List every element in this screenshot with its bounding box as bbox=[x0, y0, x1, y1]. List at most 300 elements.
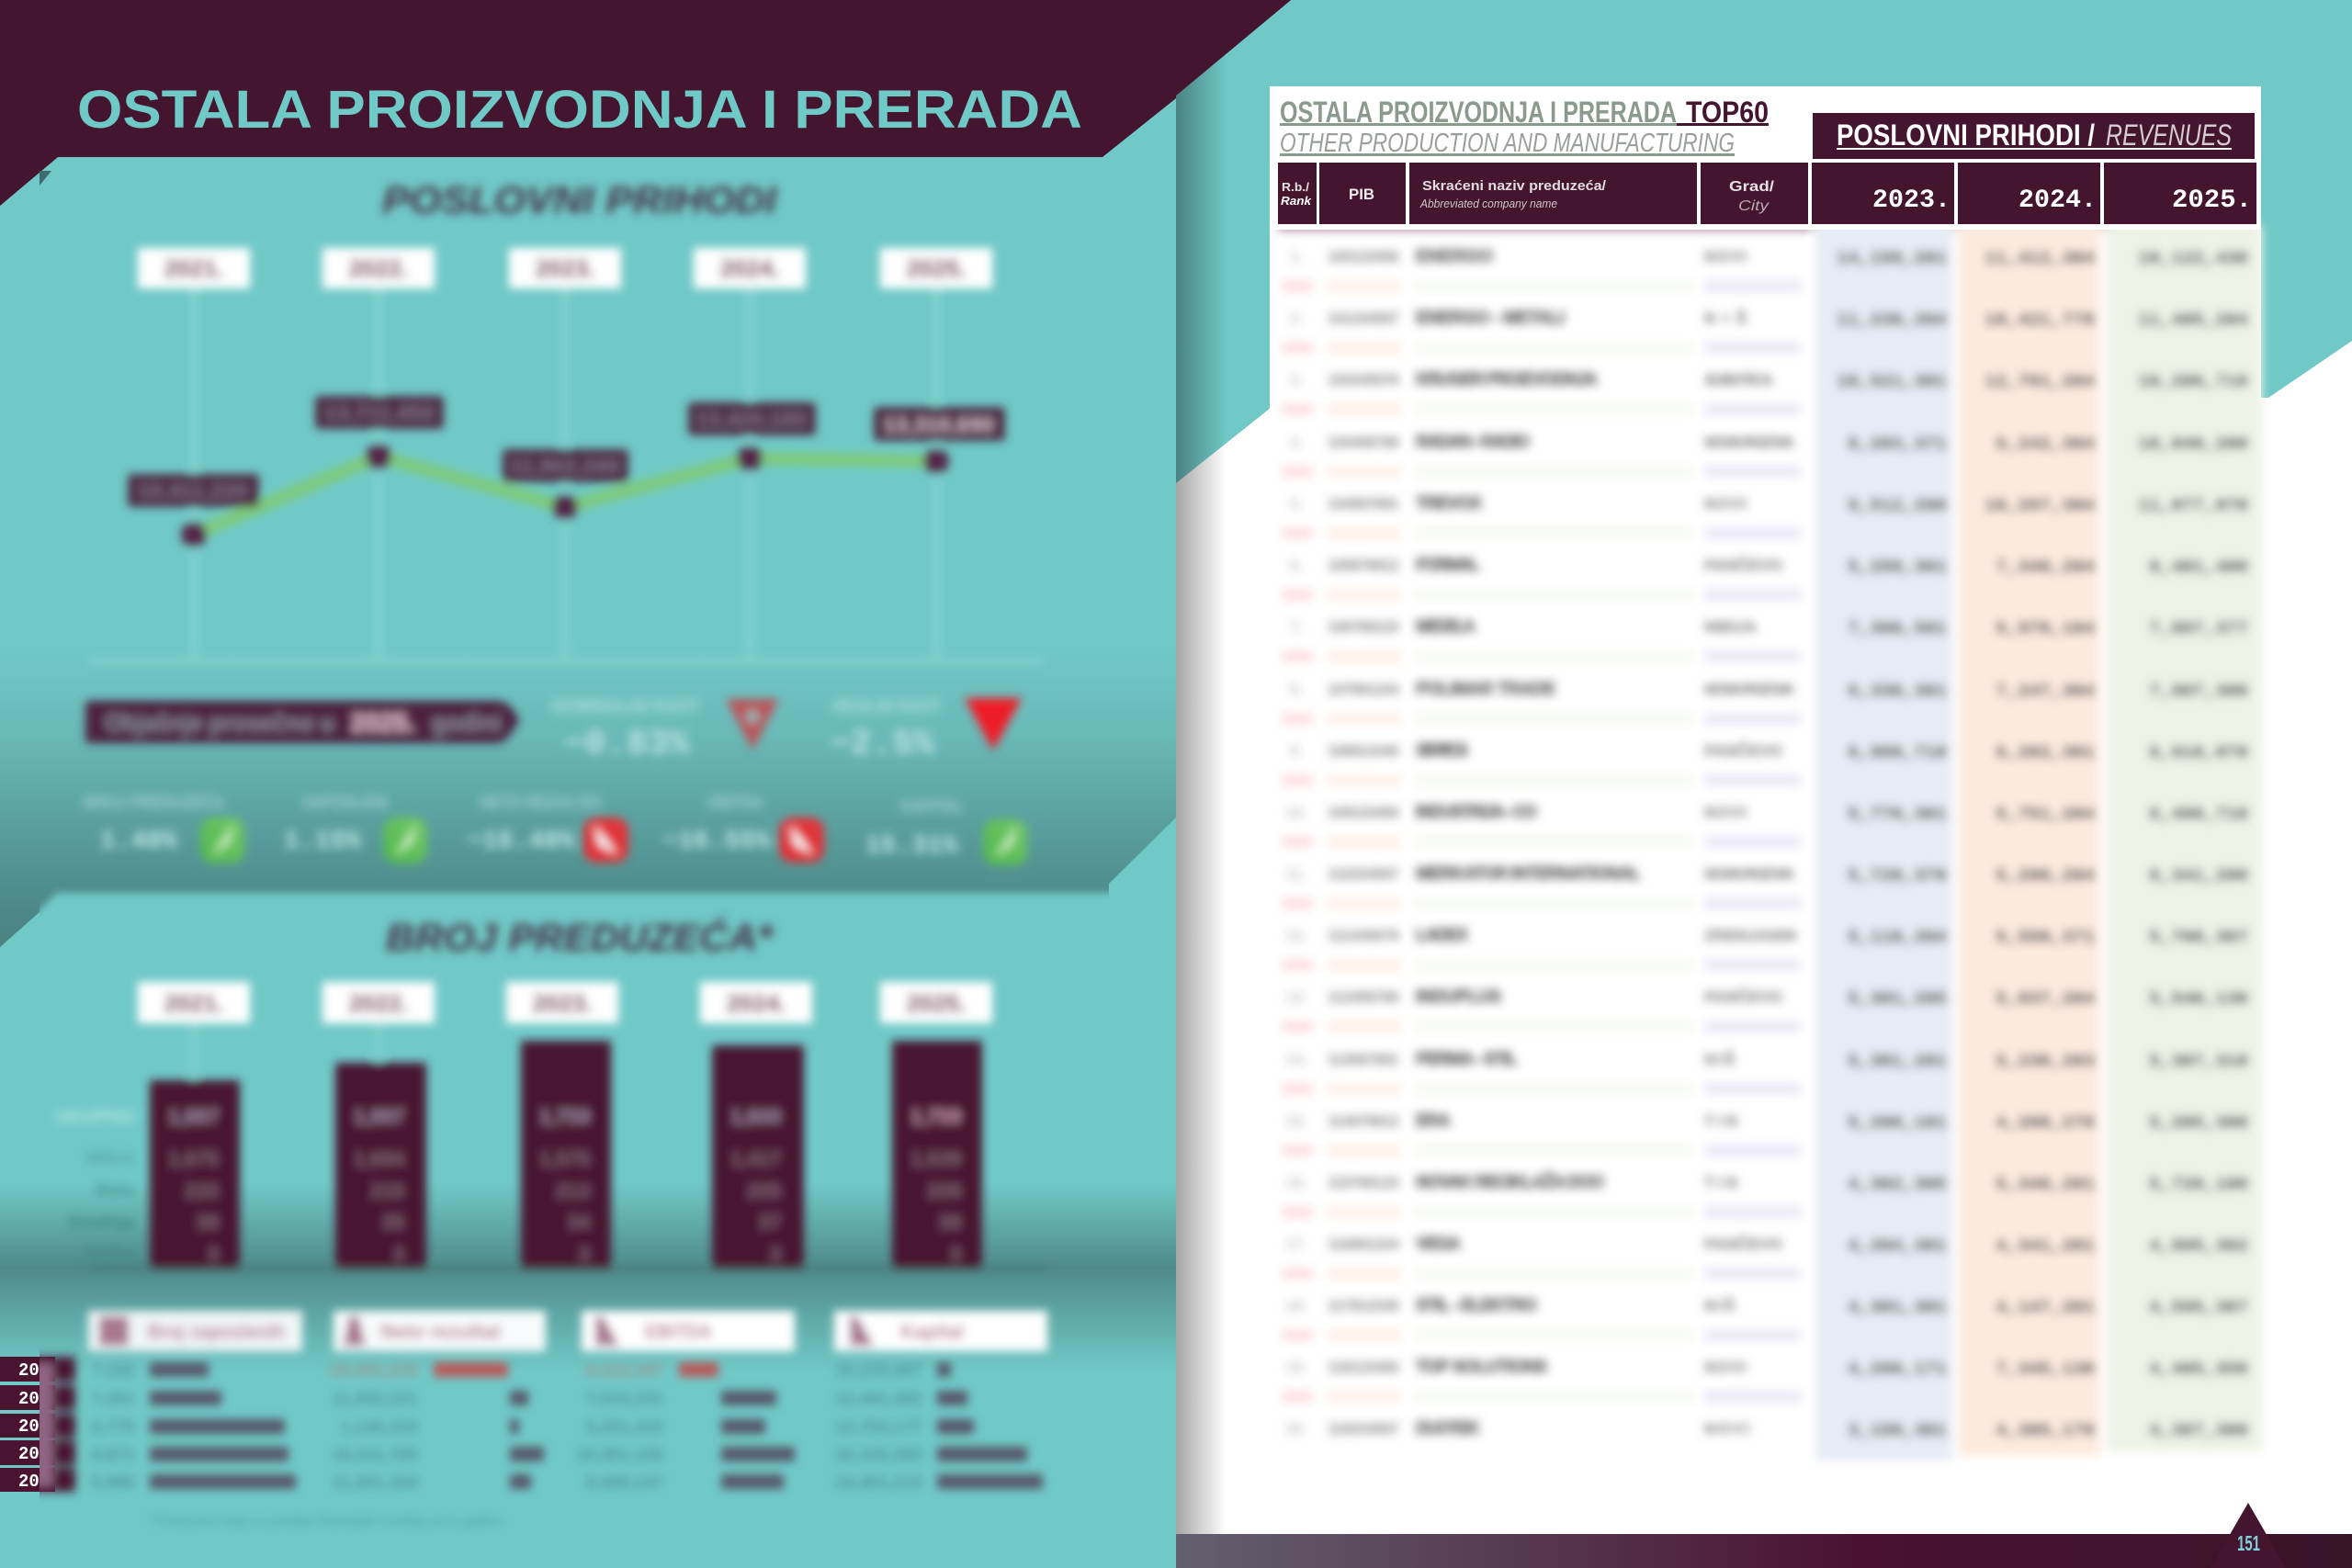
row 5 bbox=[1282, 494, 2248, 539]
row 8: 8. bbox=[1290, 681, 1303, 698]
bar values bbox=[168, 1105, 961, 1266]
row 14 bbox=[1282, 1050, 2248, 1095]
row 8: NOVA PAZOVA bbox=[1704, 681, 1794, 698]
row 4 bbox=[1282, 433, 2248, 478]
year tabs, left edge: 20 bbox=[18, 1444, 40, 1464]
row 12: LADEX bbox=[1416, 926, 1468, 945]
row 20 bbox=[1285, 1419, 2248, 1442]
row 8: 107891234 bbox=[1328, 681, 1400, 698]
stat: kapital: KAPITAL bbox=[900, 797, 964, 817]
line chart bbox=[90, 248, 1043, 661]
bar values: 35 bbox=[382, 1211, 404, 1234]
column header: city: Grad/ bbox=[1729, 179, 1775, 195]
row 15: 5,200,101 bbox=[1848, 1113, 1947, 1134]
bar chart: company counts bbox=[55, 982, 1046, 1269]
row 8: 7,807,300 bbox=[2149, 682, 2248, 703]
year labels: 2021. bbox=[164, 989, 224, 1017]
bar values: 213 bbox=[556, 1179, 590, 1202]
mini chart: ebitda: 10,301,120 bbox=[576, 1446, 663, 1465]
row 9: 9. bbox=[1290, 742, 1303, 760]
row 18: NIŠ bbox=[1704, 1297, 1735, 1314]
stat: broj preduzeća: BROJ PREDUZEĆA bbox=[84, 793, 224, 813]
mini chart: employees: 8,775 bbox=[91, 1418, 135, 1438]
stat: zaposleni bbox=[284, 794, 427, 863]
row 17: PANČEVO bbox=[1704, 1235, 1782, 1253]
row 19: TOP SOLUTIONS bbox=[1416, 1358, 1547, 1377]
row 19: 118123456 bbox=[1328, 1359, 1399, 1376]
mini chart: ebitda: 5,201,415 bbox=[585, 1418, 663, 1438]
revenues banner: POSLOVNI PRIHODI / bbox=[1837, 118, 2095, 152]
row 4: RADAN - RADIO bbox=[1416, 433, 1530, 452]
row 2: 10,421,770 bbox=[1984, 310, 2095, 332]
first section shaded band bbox=[0, 643, 1176, 951]
bar values: 3 bbox=[393, 1243, 404, 1266]
button: broj zaposlenih: Broj zaposlenih bbox=[148, 1320, 285, 1343]
bar values: 220 bbox=[185, 1179, 219, 1202]
row 15 bbox=[1282, 1111, 2248, 1156]
year labels: 2021. bbox=[164, 254, 224, 282]
footer bar bbox=[1176, 1534, 2352, 1568]
row 1: ENERGO bbox=[1416, 247, 1493, 266]
bar values: 38 bbox=[197, 1211, 219, 1234]
stat: kapital bbox=[865, 797, 1027, 865]
row 4: NOVA PAZOVA bbox=[1704, 434, 1794, 451]
row 5: 104567891 bbox=[1328, 495, 1399, 513]
column header: company name bbox=[1419, 178, 1607, 210]
mini chart: capital: 10,215,407 bbox=[835, 1361, 922, 1381]
table subtitle: OTHER PRODUCTION AND MANUFACTURING bbox=[1280, 129, 1735, 158]
row 10: 5,751,204 bbox=[1996, 805, 2095, 826]
row 4: 103456789 bbox=[1328, 434, 1399, 451]
row 3: SUBOTICA bbox=[1704, 371, 1773, 389]
bar values: 38 bbox=[939, 1211, 961, 1234]
row 15: ERA bbox=[1416, 1111, 1451, 1131]
year tabs, left edge: 20 bbox=[18, 1416, 40, 1437]
dark corner on right page bbox=[1176, 0, 1291, 96]
revenues banner: REVENUES bbox=[2106, 118, 2232, 152]
bar values: 1,417 bbox=[730, 1147, 781, 1170]
row 20: 3,150,301 bbox=[1848, 1421, 1947, 1442]
row 16: NOVAK RECIKLAŽA DOO bbox=[1416, 1172, 1604, 1192]
bar values: 3 bbox=[770, 1243, 781, 1266]
row 16: 5,720,100 bbox=[2149, 1175, 2248, 1196]
row 9: 6,960,710 bbox=[1848, 743, 1947, 764]
row 18: 18. bbox=[1285, 1297, 1307, 1314]
mini chart: net result bbox=[325, 1361, 544, 1493]
row labels: Mala bbox=[95, 1180, 136, 1201]
callout pill bbox=[88, 704, 516, 740]
row 16: 5,340,201 bbox=[1996, 1175, 2095, 1196]
row 19: 4,405,350 bbox=[2149, 1359, 2248, 1381]
year labels: 2022. bbox=[348, 254, 409, 282]
row 11: NOVA PAZOVA bbox=[1704, 865, 1794, 883]
right page background bbox=[1176, 0, 2352, 1568]
row 1: 11,412,304 bbox=[1984, 249, 2095, 270]
stat: nominal change: NOMINALNI RAST bbox=[551, 697, 699, 716]
stat: zaposleni: ZAPOSLENI bbox=[301, 794, 388, 813]
row 12: 5,700,307 bbox=[2149, 928, 2248, 949]
row 8: 6,330,301 bbox=[1848, 682, 1947, 703]
column headers: years bbox=[1872, 186, 2252, 215]
bars bbox=[150, 1041, 982, 1269]
row 17: 17. bbox=[1285, 1235, 1307, 1253]
row labels: Mikro bbox=[86, 1148, 135, 1168]
row 14: 5,230,203 bbox=[1996, 1052, 2095, 1073]
button: kapital bbox=[834, 1311, 1047, 1351]
row 10: 109123456 bbox=[1328, 804, 1399, 821]
row 6: PANČEVO bbox=[1704, 557, 1782, 574]
row 2 bbox=[1282, 309, 2248, 354]
table title: TOP60 bbox=[1686, 96, 1769, 129]
lower section teal, right edge bbox=[1109, 818, 1176, 1568]
connector lines bbox=[194, 1023, 379, 1080]
row 8 bbox=[1282, 680, 2248, 725]
row 13: INDUPLUS bbox=[1416, 987, 1501, 1007]
icon: outlined down triangle bbox=[726, 699, 779, 750]
row 12: 5,550,371 bbox=[1996, 928, 2095, 949]
left page background bbox=[0, 0, 1176, 1568]
column header: rank: Rank bbox=[1281, 194, 1312, 208]
row 17: 116891234 bbox=[1328, 1235, 1400, 1253]
mini chart: employees: 8,871 bbox=[91, 1446, 135, 1465]
row 1 bbox=[1282, 247, 2248, 292]
mini chart: employees bbox=[91, 1361, 296, 1493]
stat: nominal change: −0.83% bbox=[564, 725, 690, 764]
bar values: 1,675 bbox=[168, 1147, 219, 1170]
page number marker bbox=[2211, 1503, 2286, 1568]
row 5: NOVI bbox=[1704, 495, 1747, 513]
row 5: 5. bbox=[1290, 495, 1303, 513]
mini chart: employees: 7,102 bbox=[91, 1361, 135, 1381]
bar values: 1,575 bbox=[539, 1147, 590, 1170]
row 2: 11,230,204 bbox=[1837, 310, 1947, 332]
row 10: NOVI bbox=[1704, 804, 1747, 821]
row 6: FORMAL bbox=[1416, 556, 1480, 575]
mini chart: ebitda: 7,510,231 bbox=[585, 1390, 663, 1409]
row 19: 4,260,171 bbox=[1848, 1359, 1947, 1381]
bar values: 3 bbox=[579, 1243, 590, 1266]
stat: real change: −2.5% bbox=[830, 725, 934, 764]
bar values: 1,600 bbox=[730, 1105, 781, 1128]
row 20: 119234567 bbox=[1328, 1420, 1399, 1438]
data points bbox=[181, 444, 949, 547]
row 16: 115789123 bbox=[1328, 1174, 1399, 1191]
row 13 bbox=[1282, 987, 2248, 1032]
bar values: 1,759 bbox=[539, 1105, 590, 1128]
row 9: STRATOS bbox=[1416, 741, 1468, 761]
row 7: MEDELA bbox=[1416, 617, 1476, 637]
bar values: 1,759 bbox=[910, 1105, 961, 1128]
row 6: 5,250,301 bbox=[1848, 558, 1947, 579]
year labels: 2022. bbox=[348, 989, 409, 1017]
button: ebitda bbox=[582, 1311, 795, 1351]
row 3: 10,521,301 bbox=[1837, 372, 1947, 393]
row 6: 7,340,204 bbox=[1996, 558, 2095, 579]
row 1: 14,150,201 bbox=[1837, 249, 1947, 270]
row 6: 105678912 bbox=[1328, 557, 1399, 574]
row 9 bbox=[1282, 741, 2248, 786]
button: neto rezultat: Neto rezultat bbox=[380, 1320, 502, 1343]
row 13: 112456789 bbox=[1328, 988, 1399, 1006]
mini bar charts bbox=[91, 1361, 1043, 1493]
row 1: 1. bbox=[1290, 248, 1303, 265]
row 14: NIŠ bbox=[1704, 1051, 1735, 1068]
revenues banner bbox=[1813, 113, 2255, 159]
row 2: 2. bbox=[1290, 310, 1303, 327]
bar values: 37 bbox=[759, 1211, 781, 1234]
row 17: VEGA bbox=[1416, 1235, 1461, 1254]
row 18: STIL - ELEKTRO bbox=[1416, 1296, 1537, 1315]
row 9: PANČEVO bbox=[1704, 742, 1782, 760]
bar values: 1,887 bbox=[168, 1105, 219, 1128]
row 7: 5,970,104 bbox=[1996, 619, 2095, 640]
mini chart: capital bbox=[835, 1361, 1043, 1493]
row labels: Srednja bbox=[68, 1213, 136, 1233]
row 2: NIŠ bbox=[1704, 310, 1747, 327]
value labels bbox=[128, 396, 1005, 507]
column header cells bbox=[1278, 163, 2256, 224]
row 7: 7,380,501 bbox=[1848, 619, 1947, 640]
year tabs, left edge: 20 bbox=[18, 1360, 40, 1381]
row 20: 20. bbox=[1285, 1420, 1307, 1438]
trend line bbox=[194, 457, 936, 535]
stat: real change: REALNI RAST bbox=[833, 697, 941, 716]
row 14: 5,301,201 bbox=[1848, 1052, 1947, 1073]
row 11: 110234567 bbox=[1328, 865, 1399, 883]
button: kapital: Kapital bbox=[900, 1320, 964, 1343]
button: broj zaposlenih bbox=[88, 1311, 302, 1351]
row 3: 102345678 bbox=[1328, 371, 1399, 389]
year labels bbox=[138, 982, 992, 1023]
row 19: 7,345,130 bbox=[1996, 1359, 2095, 1381]
stat row bbox=[84, 793, 1027, 865]
row 12: 12. bbox=[1285, 927, 1307, 944]
row 20: 4,305,170 bbox=[1996, 1421, 2095, 1442]
row 13: 5,037,204 bbox=[1996, 989, 2095, 1010]
row 12 bbox=[1282, 926, 2248, 971]
year tabs, left edge: 20 bbox=[18, 1472, 40, 1492]
year labels: 2023. bbox=[535, 254, 595, 282]
row 12: 5,110,204 bbox=[1848, 928, 1947, 949]
mini chart: ebitda bbox=[576, 1361, 795, 1493]
row 7: 106789123 bbox=[1328, 618, 1399, 636]
row 2: 101234567 bbox=[1328, 310, 1399, 327]
row 5: 11,077,070 bbox=[2138, 496, 2248, 517]
row 5: 10,297,304 bbox=[1984, 496, 2095, 517]
row 10: 5,770,301 bbox=[1848, 805, 1947, 826]
value labels: 13,310,690 bbox=[884, 413, 994, 436]
mini chart: capital: 12,704,177 bbox=[835, 1418, 922, 1438]
row 11: 5,720,370 bbox=[1848, 866, 1947, 887]
stat: kapital: 15.31% bbox=[865, 832, 958, 861]
year tabs, left edge bbox=[0, 1357, 55, 1492]
row 20: DUOTEK bbox=[1416, 1419, 1480, 1438]
stat: ebitda bbox=[662, 794, 824, 863]
row 15: 114678912 bbox=[1328, 1112, 1399, 1130]
row 11: MERKATOR INTERNATIONAL bbox=[1416, 864, 1641, 884]
year labels bbox=[138, 248, 992, 288]
bar values: 3 bbox=[208, 1243, 219, 1266]
column header: city: City bbox=[1738, 198, 1770, 214]
row 12: 111345678 bbox=[1328, 927, 1399, 944]
mini chart: net result: 10,211,705 bbox=[332, 1446, 418, 1465]
row 11: 6,341,200 bbox=[2149, 866, 2248, 887]
row 18: 4,595,307 bbox=[2149, 1298, 2248, 1319]
column header: PIB: PIB bbox=[1349, 186, 1374, 203]
callout pill: godini bbox=[432, 708, 502, 737]
value labels: 10,411,220 bbox=[139, 479, 247, 502]
row 15: TIN bbox=[1704, 1112, 1737, 1130]
year column tints bbox=[1816, 225, 2262, 1461]
column header: company name: Abbreviated company name bbox=[1419, 197, 1557, 210]
stat: neto rezultat: −16.40% bbox=[467, 828, 575, 856]
stat: neto rezultat bbox=[467, 794, 628, 863]
row 10: INDUSTRIJA - CO bbox=[1416, 803, 1537, 822]
mini chart: capital: 22,102,350 bbox=[835, 1446, 922, 1465]
row 8: 7,247,304 bbox=[1996, 682, 2095, 703]
row 3: 10,206,710 bbox=[2138, 372, 2248, 393]
button: ebitda: EBITDA bbox=[645, 1320, 712, 1343]
lower section teal, left edge bbox=[0, 912, 40, 1568]
row 18 bbox=[1282, 1296, 2248, 1341]
gutter shadow bbox=[1176, 0, 1227, 1534]
stat: neto rezultat: NETO REZULTAT bbox=[480, 794, 603, 813]
panel: table header card bbox=[1270, 86, 2261, 230]
row 1: 100123456 bbox=[1328, 248, 1399, 265]
row 11: 5,200,204 bbox=[1996, 866, 2095, 887]
lower section teal panel bbox=[40, 889, 1109, 951]
mini chart: employees: 7,251 bbox=[91, 1390, 135, 1409]
row labels: Velika bbox=[83, 1243, 136, 1263]
column header: company name: Skraćeni naziv preduzeća/ bbox=[1422, 178, 1607, 194]
year tabs, left edge: 20 bbox=[18, 1389, 40, 1409]
row labels: UKUPNO bbox=[55, 1107, 135, 1127]
row 17: 4,341,201 bbox=[1996, 1236, 2095, 1258]
row 17 bbox=[1282, 1235, 2248, 1280]
stat: broj preduzeća: 1.40% bbox=[100, 828, 177, 856]
mini chart: capital: 12,441,302 bbox=[835, 1390, 922, 1409]
bar values: 205 bbox=[747, 1179, 781, 1202]
row 1: 10,122,430 bbox=[2138, 249, 2248, 270]
row 20: NOVI bbox=[1704, 1420, 1749, 1438]
row 20: 4,387,300 bbox=[2149, 1421, 2248, 1442]
row 9: 108912345 bbox=[1328, 742, 1399, 760]
row 13: 5,301,205 bbox=[1848, 989, 1947, 1010]
row 9: 6,910,070 bbox=[2149, 743, 2248, 764]
row 7 bbox=[1282, 617, 2248, 662]
mini chart: ebitda: 8,405,147 bbox=[585, 1473, 663, 1493]
row 16 bbox=[1282, 1172, 2248, 1218]
page number marker: 151 bbox=[2237, 1531, 2260, 1555]
row 18: 4,147,201 bbox=[1996, 1298, 2095, 1319]
column header: city bbox=[1729, 179, 1775, 214]
row 13: PANČEVO bbox=[1704, 988, 1782, 1006]
mini chart: ebitda: -4,112,107 bbox=[581, 1361, 663, 1381]
row 16: TIN bbox=[1704, 1174, 1737, 1191]
row labels bbox=[55, 1107, 136, 1263]
heading: poslovni prihodi: POSLOVNI PRIHODI bbox=[382, 178, 777, 221]
panel: blurred top 60 table rows bbox=[1278, 224, 2262, 1461]
row 4: 8,203,371 bbox=[1848, 434, 1947, 456]
row 6: 8,401,400 bbox=[2149, 558, 2248, 579]
row 4: 4. bbox=[1290, 434, 1303, 451]
backing for the left tabs bbox=[40, 1349, 83, 1499]
row 19: NOVI bbox=[1704, 1359, 1747, 1376]
row 18: 117912345 bbox=[1328, 1297, 1399, 1314]
bar values: 1,897 bbox=[354, 1105, 404, 1128]
row 14: 113567891 bbox=[1328, 1051, 1399, 1068]
panel: blurred left page content bbox=[18, 178, 1047, 1529]
callout pill: 2025. bbox=[351, 708, 414, 737]
bar values: 1,694 bbox=[354, 1147, 405, 1170]
row 19 bbox=[1282, 1358, 2248, 1403]
stat: zaposleni: 1.15% bbox=[284, 828, 361, 856]
row 7: 7. bbox=[1290, 618, 1303, 636]
right page white area bbox=[1176, 341, 2352, 1568]
row 9: 6,202,301 bbox=[1996, 743, 2095, 764]
bar values: 34 bbox=[568, 1211, 591, 1234]
row 14: 14. bbox=[1285, 1051, 1307, 1068]
mini chart: employees: 8,980 bbox=[91, 1473, 135, 1493]
column headers: years: 2025. bbox=[2172, 186, 2252, 215]
bar values: 3 bbox=[950, 1243, 961, 1266]
row 6: 6. bbox=[1290, 557, 1303, 574]
row 14: PERMA - STIL bbox=[1416, 1050, 1518, 1069]
metric buttons bbox=[88, 1311, 1047, 1351]
row 11 bbox=[1282, 864, 2248, 909]
row 2: 11,405,204 bbox=[2138, 310, 2248, 332]
column header: rank bbox=[1281, 180, 1312, 208]
bar values: 209 bbox=[927, 1179, 961, 1202]
row 2: ENERGO - METALI bbox=[1416, 309, 1565, 328]
row 5: 9,512,280 bbox=[1848, 496, 1947, 517]
row 18: 4,301,301 bbox=[1848, 1298, 1947, 1319]
row 3: 12,701,204 bbox=[1984, 372, 2095, 393]
year labels: 2025. bbox=[906, 989, 967, 1017]
title: OSTALA PROIZVODNJA I PRERADA bbox=[77, 80, 1082, 140]
row 10: 10. bbox=[1285, 804, 1307, 821]
stat: nominal change bbox=[551, 697, 779, 764]
row 13: 13. bbox=[1285, 988, 1307, 1006]
year labels: 2024. bbox=[719, 254, 780, 282]
row 3: KRUGER PROIZVODNJA bbox=[1416, 370, 1598, 389]
row 7: INĐIJA bbox=[1704, 618, 1757, 636]
column headers: years: 2024. bbox=[2018, 186, 2097, 215]
bar values: 1,539 bbox=[910, 1147, 961, 1170]
value labels: 13,420,180 bbox=[696, 408, 807, 431]
header shadow bbox=[1278, 224, 2256, 231]
bar values: 215 bbox=[370, 1179, 404, 1202]
stat: ebitda: EBITDA bbox=[708, 794, 763, 813]
left page title banner bbox=[0, 0, 1291, 206]
row 17: 4,895,302 bbox=[2149, 1236, 2248, 1258]
year labels: 2023. bbox=[532, 989, 593, 1017]
value labels: 11,902,340 bbox=[511, 455, 619, 478]
row 5: TREVOX bbox=[1416, 494, 1482, 513]
year labels: 2024. bbox=[726, 989, 786, 1017]
mini chart: net result: 11,032,221 bbox=[332, 1390, 418, 1409]
stat: ebitda: −16.55% bbox=[662, 828, 771, 856]
row 16: 4,302,305 bbox=[1848, 1175, 1947, 1196]
row 6 bbox=[1282, 556, 2248, 601]
callout pill: Objašnje prosečno u bbox=[105, 708, 334, 737]
row 13: 5,540,130 bbox=[2149, 989, 2248, 1010]
stat: broj preduzeća bbox=[84, 793, 244, 863]
table white backing bbox=[1270, 220, 2261, 432]
row 4: 10,040,200 bbox=[2138, 434, 2248, 456]
table title: OSTALA PROIZVODNJA I PRERADA bbox=[1280, 96, 1677, 129]
row 1: NOVI bbox=[1704, 248, 1747, 265]
